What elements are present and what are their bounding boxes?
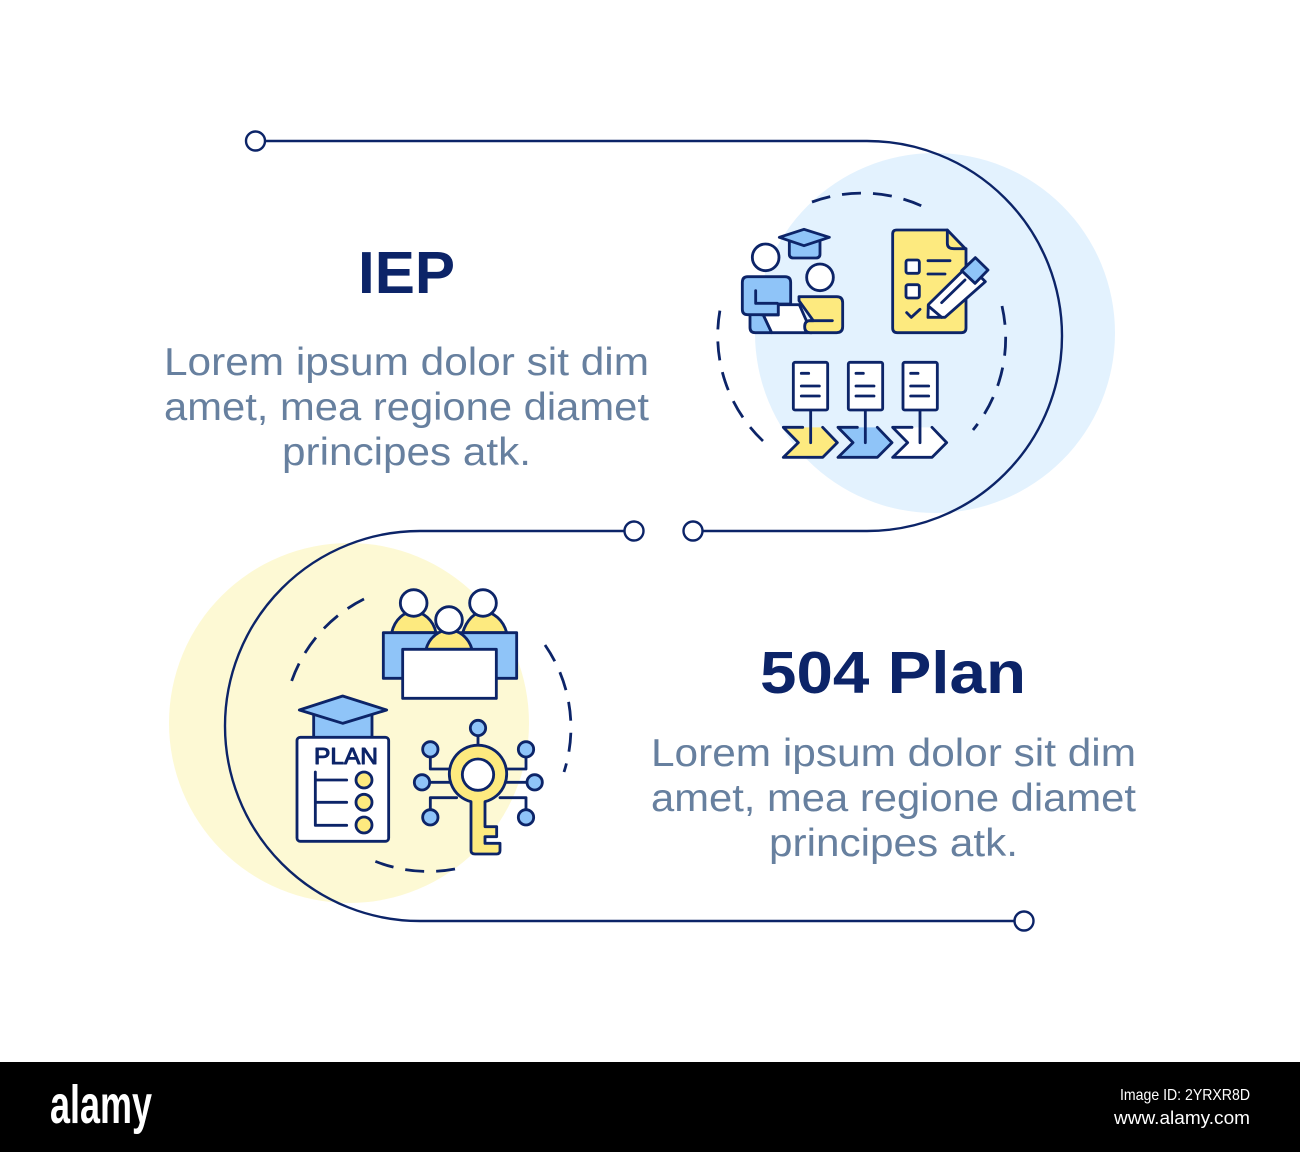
footer bar <box>0 1062 1300 1152</box>
icon: roadmap with three documents and chevrons <box>783 362 947 457</box>
text block: 504 Plan description <box>651 732 1136 865</box>
text block: 504 Plan description: amet, mea regione diamet <box>651 777 1136 820</box>
text block: IEP description: amet, mea regione diamet <box>164 386 649 429</box>
bottom connector line <box>225 522 1034 930</box>
footer url: www.alamy.com <box>1113 1108 1250 1128</box>
text block: IEP description <box>164 341 649 474</box>
icon: teacher and student with graduation cap <box>742 229 843 333</box>
background circle: yellow <box>169 543 529 903</box>
text block: IEP description: principes atk. <box>282 431 531 474</box>
label: PLAN: PLAN <box>314 743 378 769</box>
dashed ring: top icon <box>718 193 1006 441</box>
icon: key with network nodes <box>414 720 542 854</box>
text block: 504 Plan description: principes atk. <box>769 822 1018 865</box>
icon: checklist document with pencil <box>893 230 988 333</box>
footer image id: Image ID: 2YRXR8D <box>1120 1087 1250 1104</box>
icon: three people behind desks <box>383 590 517 698</box>
top connector line <box>246 132 1062 540</box>
footer logo: alamy <box>50 1075 152 1135</box>
heading: IEP: IEP <box>358 240 455 306</box>
heading: 504 Plan: 504 Plan <box>760 640 1026 706</box>
background circle: blue <box>755 153 1115 513</box>
text block: IEP description: Lorem ipsum dolor sit dim <box>164 341 649 384</box>
text block: 504 Plan description: Lorem ipsum dolor sit dim <box>651 732 1136 775</box>
dashed ring: bottom icon <box>290 599 571 871</box>
icon: plan clipboard with graduation cap <box>297 696 389 841</box>
